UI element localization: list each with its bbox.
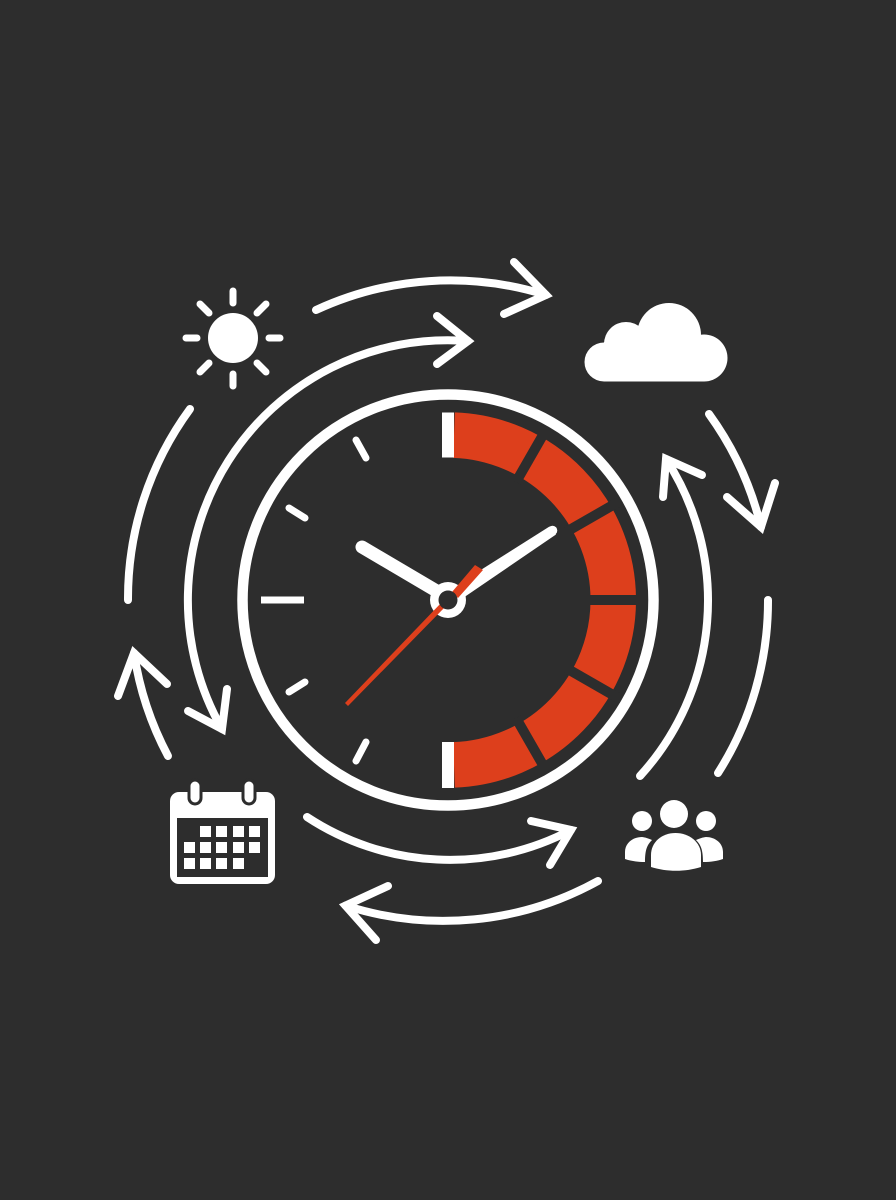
arrow: right outer bottom xyxy=(718,600,768,773)
hour hand xyxy=(362,547,440,593)
arrow: lower left xyxy=(118,653,168,756)
icon: people xyxy=(625,800,723,871)
clock xyxy=(242,394,654,806)
hub xyxy=(430,582,466,618)
arrow: bottom inner xyxy=(307,817,571,865)
arrows xyxy=(118,262,775,940)
icon: sun xyxy=(186,291,280,386)
red progress segments xyxy=(442,412,645,788)
icon: cloud xyxy=(584,303,728,382)
second hand xyxy=(345,565,483,706)
arrow: inner left sweep xyxy=(188,316,468,729)
clock outer ring xyxy=(242,394,654,806)
arrow: right outer top xyxy=(709,414,775,527)
icon: calendar xyxy=(170,786,275,884)
arrow: right inner xyxy=(640,459,708,776)
minute hand xyxy=(452,526,557,598)
arrow: top outer xyxy=(316,262,546,314)
hour ticks xyxy=(261,440,366,761)
arrow: outer left xyxy=(128,409,190,600)
hub centre xyxy=(438,590,458,610)
arrow: bottom outer xyxy=(346,881,598,940)
